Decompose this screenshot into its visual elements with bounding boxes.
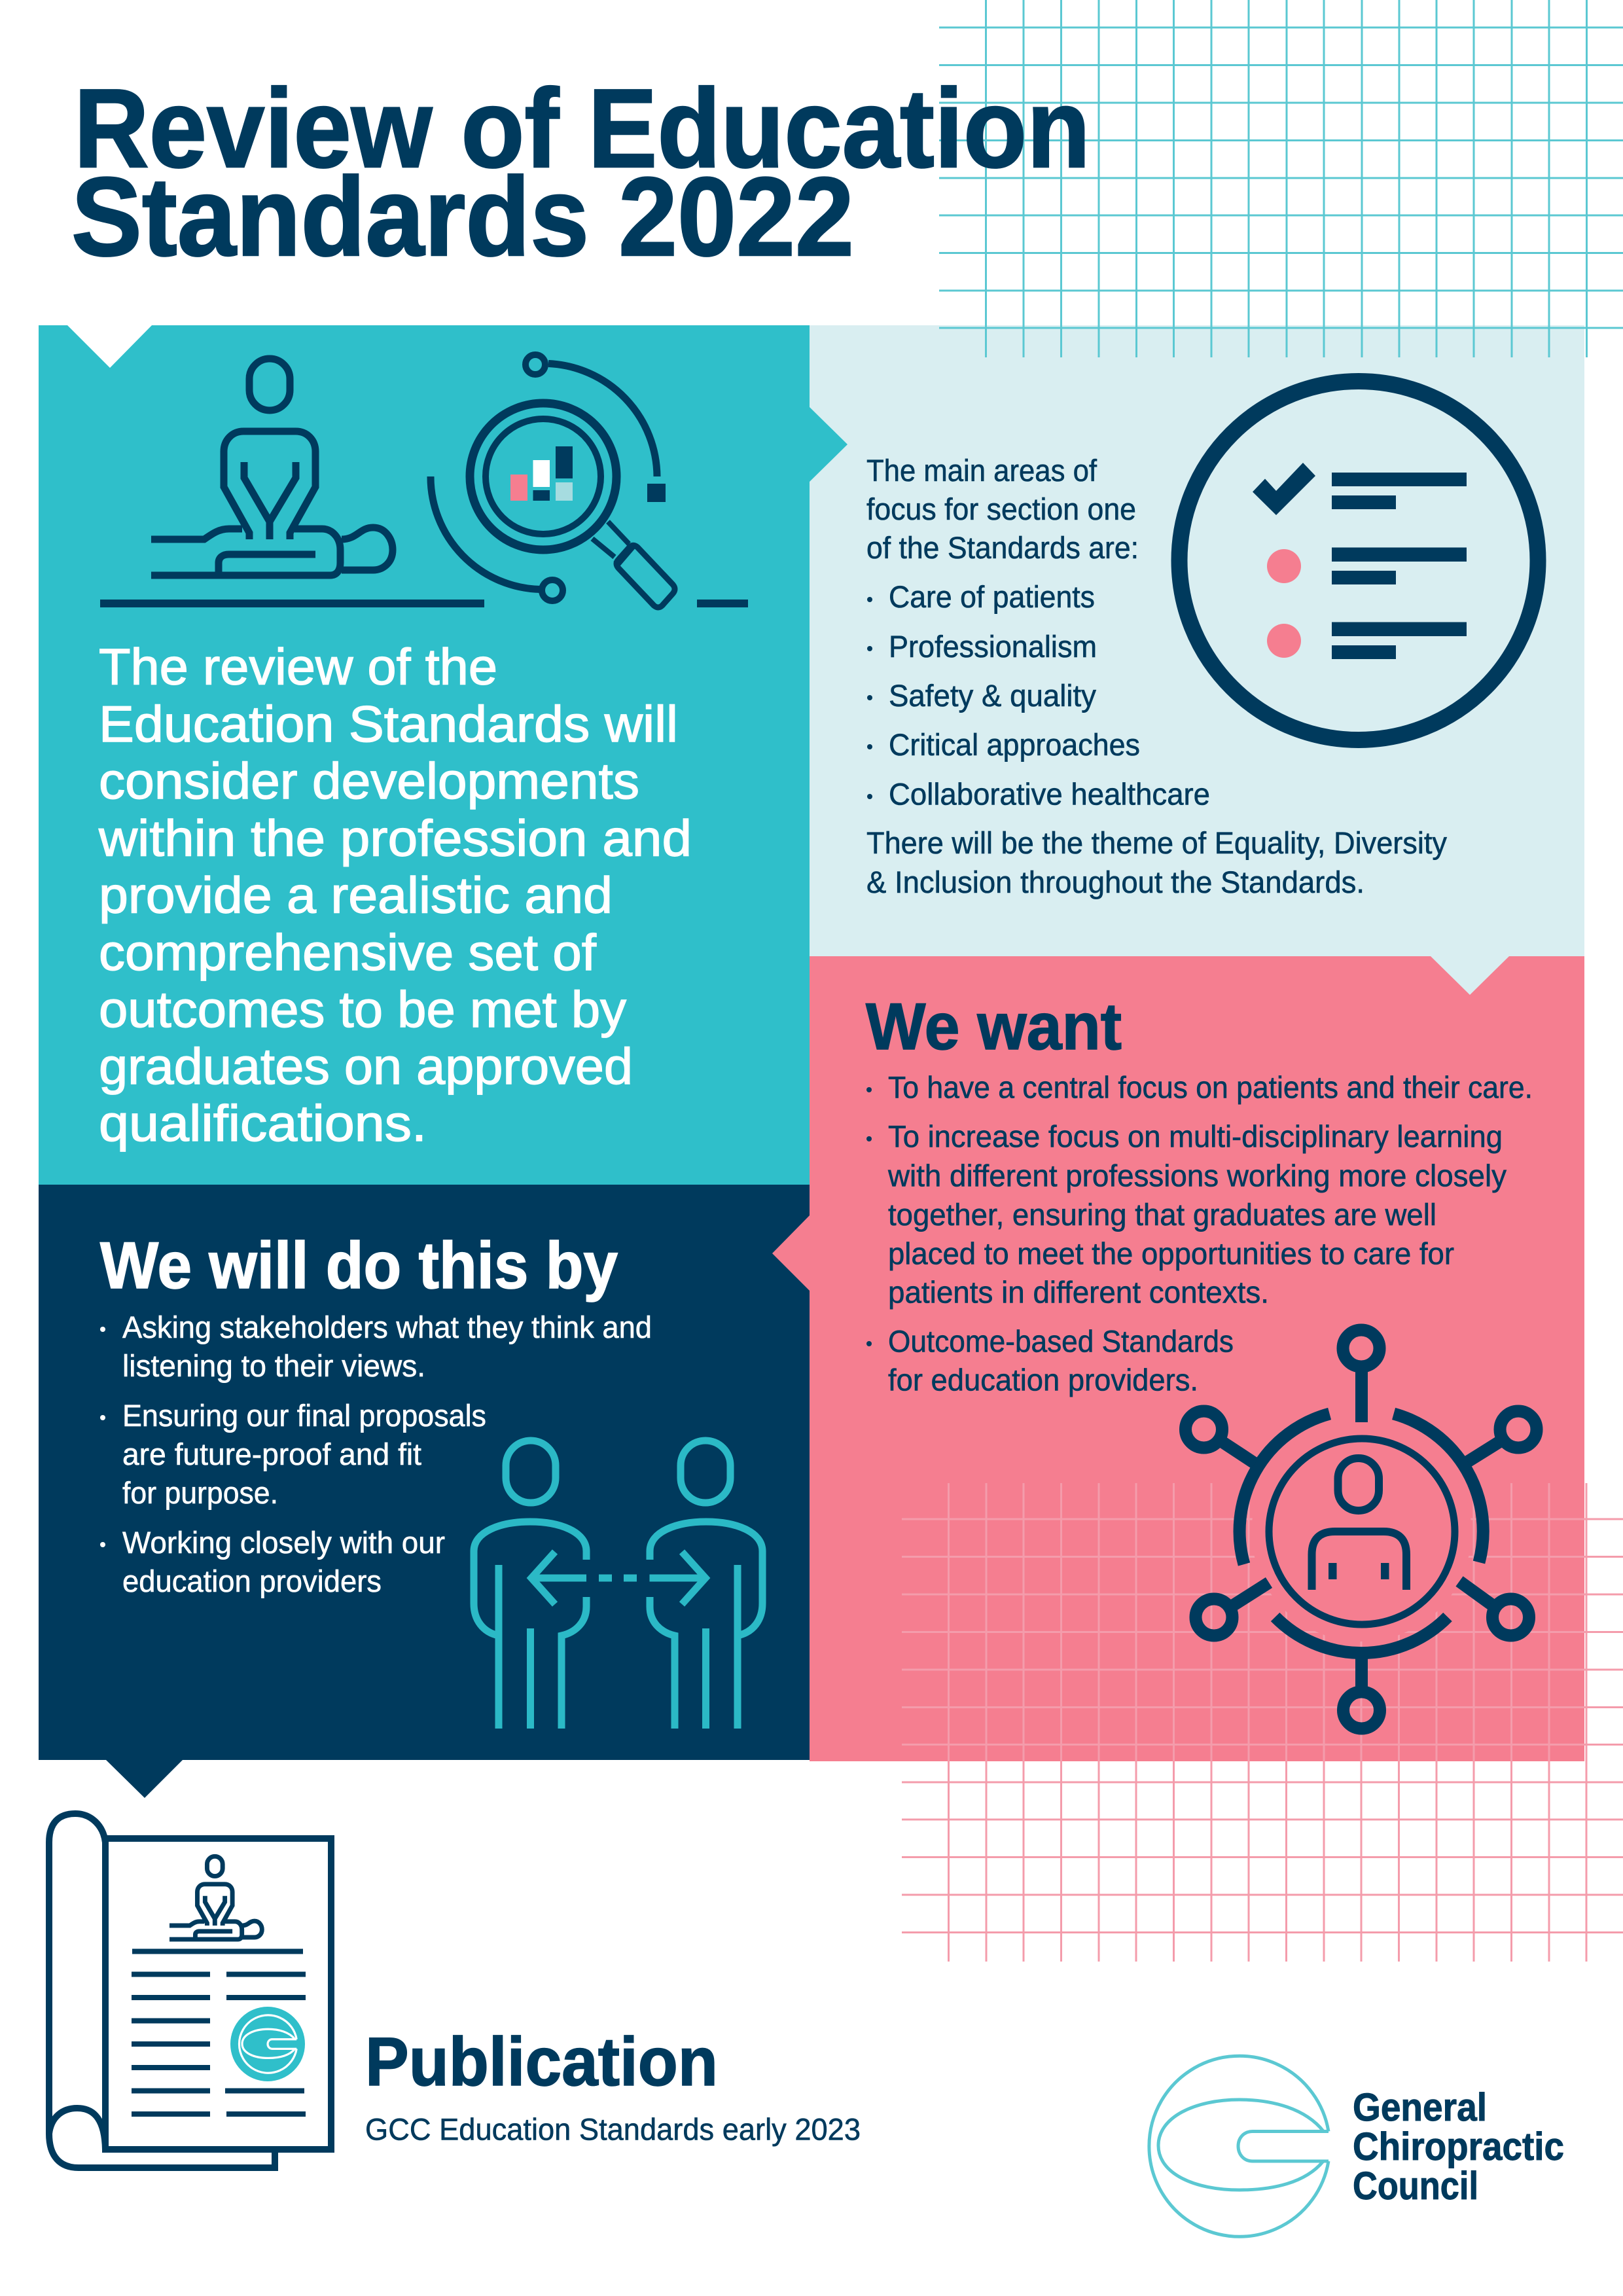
text: review description: graduates on approved bbox=[99, 1037, 633, 1095]
text: review description: The review of the bbox=[99, 637, 497, 695]
text: review description: within the profession and bbox=[98, 809, 692, 867]
bullet list: wants: placed to meet the opportunities to care for bbox=[888, 1236, 1454, 1271]
bullet list: wants: To increase focus on multi-disciplinary learning bbox=[888, 1119, 1503, 1153]
text: main areas intro bbox=[866, 453, 1139, 565]
bullet list: focus areas bbox=[867, 579, 1210, 812]
text: equality theme bbox=[866, 825, 1447, 899]
bullet list: wants: To have a central focus on patients and their care. bbox=[888, 1069, 1533, 1105]
panel: review lead bbox=[39, 325, 847, 1185]
text: review description: Education Standards will bbox=[99, 695, 678, 753]
text: main areas intro: focus for section one bbox=[866, 492, 1136, 526]
heading: publication: Publication bbox=[365, 2024, 718, 2100]
bullet list: wants: together, ensuring that graduates are well bbox=[888, 1197, 1436, 1232]
bullet list: actions: listening to their views. bbox=[122, 1348, 425, 1383]
bullet list: wants: for education providers. bbox=[888, 1363, 1198, 1397]
text: equality theme: There will be the theme of Equality, Diversity bbox=[866, 825, 1447, 860]
panel: main areas of focus bbox=[810, 325, 1584, 995]
icon: publication document bbox=[49, 1814, 331, 2168]
bullet list: wants: Outcome-based Standards bbox=[888, 1323, 1234, 1359]
heading: we want: We want bbox=[866, 990, 1122, 1064]
panel: we will do this by bbox=[39, 1185, 810, 1798]
icon: chiropractor treating patient bbox=[151, 359, 393, 575]
text: review description: consider developments bbox=[99, 752, 639, 810]
bullet list: wants: patients in different contexts. bbox=[888, 1275, 1269, 1309]
icon: logo mark bbox=[1149, 2056, 1329, 2236]
text: review description: outcomes to be met by bbox=[99, 980, 626, 1038]
bullet list: actions: Working closely with our bbox=[122, 1525, 445, 1560]
bullet list: wants: with different professions working more closely bbox=[887, 1158, 1507, 1193]
title: Standards 2022 bbox=[71, 154, 854, 279]
text: equality theme: & Inclusion throughout the Standards. bbox=[866, 865, 1364, 899]
ground line bbox=[100, 600, 748, 607]
text: council name: General bbox=[1353, 2085, 1487, 2129]
bullet list: actions: for purpose. bbox=[122, 1475, 278, 1510]
text: main areas intro: of the Standards are: bbox=[866, 530, 1139, 565]
text: review description: comprehensive set of bbox=[99, 924, 596, 981]
text: council name bbox=[1353, 2085, 1564, 2208]
bullet list: focus areas: Professionalism bbox=[889, 629, 1097, 664]
text: review description: provide a realistic and bbox=[99, 867, 613, 924]
icon: mini logo badge bbox=[230, 2007, 305, 2081]
title: Review of Education bbox=[74, 66, 1090, 191]
bullet list: actions: education providers bbox=[122, 1564, 382, 1598]
text: council name: Council bbox=[1353, 2164, 1478, 2208]
text: review description: qualifications. bbox=[99, 1094, 427, 1152]
icon: two people exchanging arrows bbox=[474, 1441, 762, 1729]
bullet list: actions: Asking stakeholders what they think and bbox=[122, 1310, 652, 1344]
bullet list: focus areas: Safety & quality bbox=[889, 678, 1096, 713]
text: review description bbox=[98, 637, 692, 1152]
heading: we will do this by: We will do this by bbox=[100, 1229, 618, 1302]
text: publication date: GCC Education Standards early 2023 bbox=[365, 2111, 861, 2147]
bullet list: actions: are future-proof and fit bbox=[122, 1437, 421, 1471]
icon: person network bbox=[1186, 1330, 1537, 1729]
logo: General Chiropractic Council bbox=[1149, 2056, 1564, 2236]
bullet list: focus areas: Critical approaches bbox=[889, 727, 1140, 762]
icon: checklist circle bbox=[1179, 381, 1538, 740]
text: main areas intro: The main areas of bbox=[866, 453, 1097, 488]
icon: mini chiropractor bbox=[169, 1856, 262, 1939]
title bbox=[71, 66, 1090, 279]
text: council name: Chiropractic bbox=[1353, 2125, 1564, 2168]
bullet list: wants bbox=[866, 1069, 1533, 1397]
bullet list: actions: Ensuring our final proposals bbox=[122, 1398, 486, 1433]
bullet list: actions bbox=[100, 1310, 652, 1598]
bullet list: focus areas: Care of patients bbox=[889, 579, 1095, 614]
bullet list: focus areas: Collaborative healthcare bbox=[889, 776, 1210, 812]
icon: magnifying glass with chart bbox=[431, 355, 675, 607]
panel: we want bbox=[772, 956, 1584, 1761]
